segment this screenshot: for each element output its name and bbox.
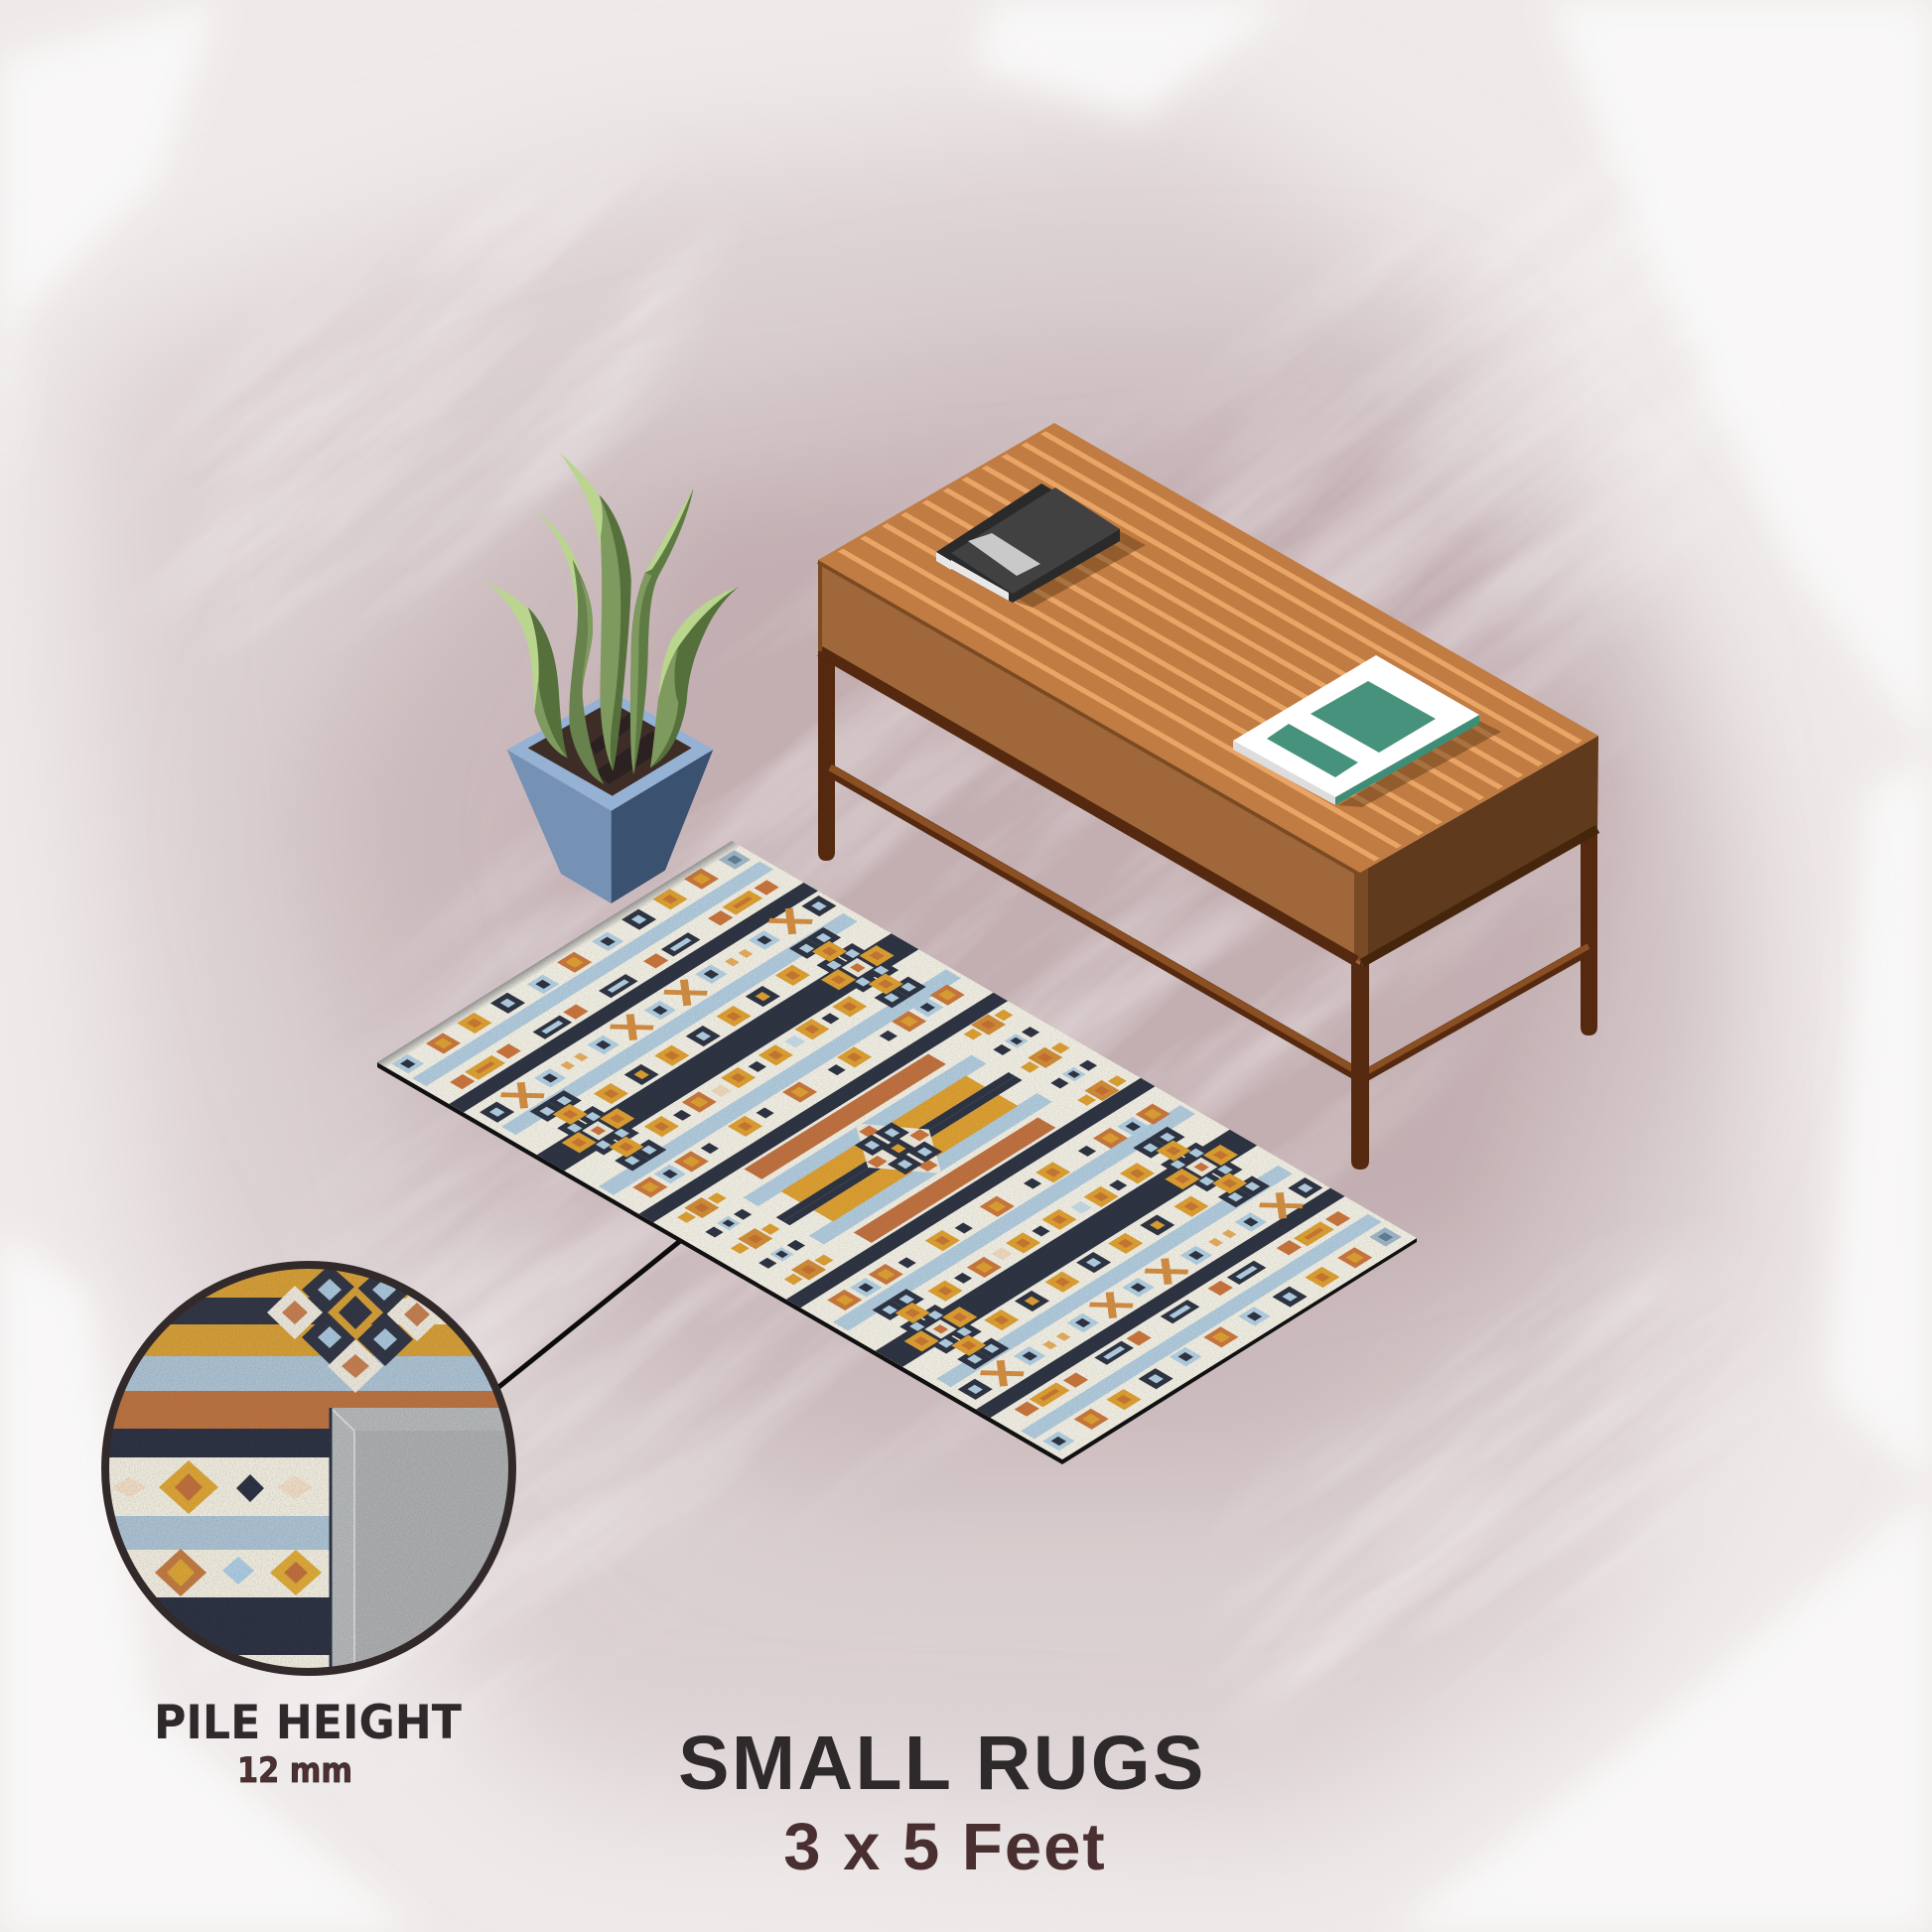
label: pile height: PILE HEIGHT — [154, 1696, 462, 1750]
connector line from rug to inset — [496, 1241, 680, 1389]
table drawer faces — [818, 560, 1598, 967]
title: SMALL RUGS — [678, 1721, 1206, 1806]
leaf centre — [560, 453, 631, 771]
green magazine — [1233, 655, 1501, 807]
table legs and stretchers — [818, 645, 1597, 1170]
table top with stripes — [818, 423, 1598, 873]
leaf far left — [487, 583, 568, 758]
inset medallion — [267, 1265, 445, 1393]
rug — [377, 841, 1417, 1464]
coffee table — [818, 423, 1598, 1170]
pile height inset circle — [105, 1265, 512, 1672]
potted plant — [487, 453, 739, 903]
label: 12 mm: 12 mm — [237, 1751, 352, 1791]
pot — [507, 692, 713, 903]
leaf right of centre — [630, 488, 693, 774]
subtitle: size: 3 x 5 Feet — [783, 1810, 1107, 1884]
black book — [936, 483, 1146, 608]
rug backing corner — [330, 1408, 512, 1672]
leaf far right — [650, 587, 739, 767]
inset row diamonds — [111, 1460, 322, 1596]
rug centre medallion — [825, 1104, 972, 1192]
leaf second — [534, 510, 604, 784]
